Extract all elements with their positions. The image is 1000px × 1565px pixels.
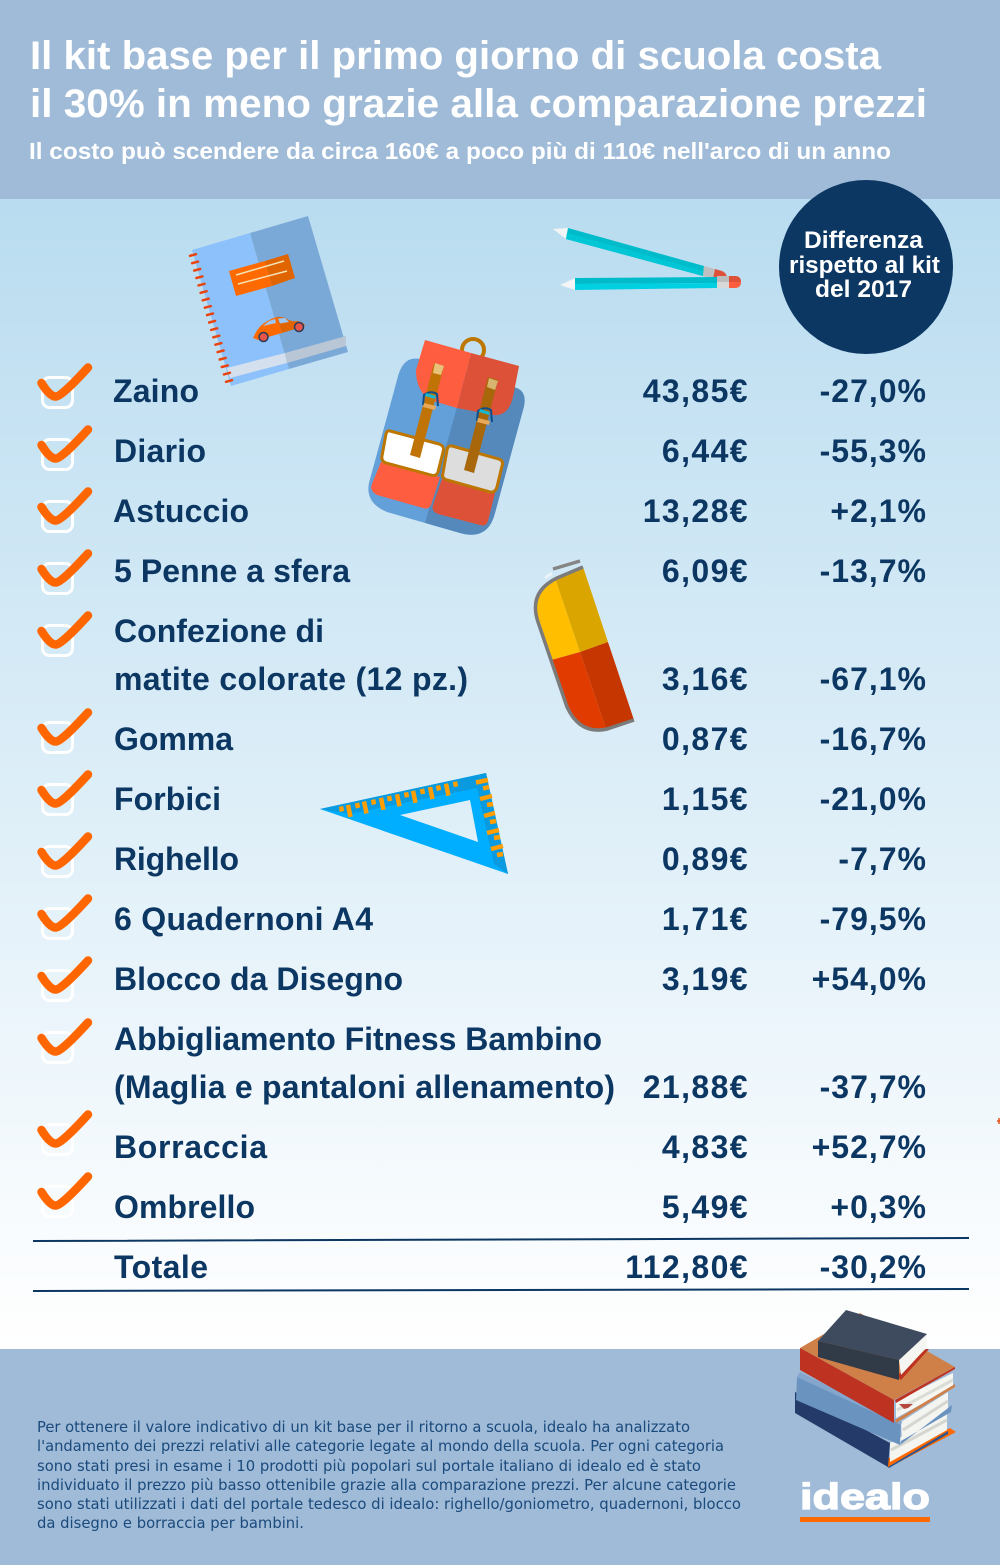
row: Ombrello: Ombrello xyxy=(114,1189,255,1225)
row: matite colorate: 3,16€ xyxy=(662,661,749,697)
row: Zaino: Zaino xyxy=(113,373,199,409)
row: Righello: -7,7% xyxy=(838,841,927,877)
row: Abbigliamento Fitness Bambino: 21,88€ xyxy=(643,1069,749,1105)
row: matite colorate: Confezione di xyxy=(114,613,324,649)
row: Blocco da Disegno xyxy=(42,960,927,1000)
row: Abbigliamento Fitness Bambino xyxy=(42,1021,927,1105)
row: Ombrello xyxy=(42,1176,927,1225)
row: 6 Quadernoni A4: -79,5% xyxy=(820,901,927,937)
row: Forbici xyxy=(42,774,927,817)
row: Diario: -55,3% xyxy=(820,433,927,469)
row: Righello xyxy=(42,836,927,877)
row: Righello: 0,89€ xyxy=(662,841,749,877)
row: Blocco da Disegno: Blocco da Disegno xyxy=(114,961,403,997)
row: Borraccia: +52,7% xyxy=(812,1129,927,1165)
page background gradient xyxy=(0,199,1000,1349)
icon: stack of books xyxy=(795,1310,956,1468)
row: 6 Quadernoni A4: 1,71€ xyxy=(662,901,749,937)
row: Gomma: -16,7% xyxy=(820,721,927,757)
footnote text: da disegno e borraccia per bambini. xyxy=(37,1514,304,1532)
row: Astuccio: +2,1% xyxy=(830,493,927,529)
row: Ombrello: 5,49€ xyxy=(662,1189,749,1225)
row: Abbigliamento Fitness Bambino: (Maglia e pantaloni allenamento) xyxy=(114,1069,615,1105)
footnote text: Per ottenere il valore indicativo di un kit base per il ritorno a scuola, idealo ha analizzato xyxy=(37,1418,690,1436)
row: 5 Penne a sfera xyxy=(42,553,927,594)
icon: pencils xyxy=(553,228,741,290)
footnote text: sono stati utilizzati i dati del portale tedesco di idealo: righello/goniometro, quadernoni, blocco xyxy=(37,1495,741,1513)
row: Zaino xyxy=(42,368,927,409)
row: 6 Quadernoni A4: 6 Quadernoni A4 xyxy=(114,901,373,937)
row: Blocco da Disegno: +54,0% xyxy=(812,961,927,997)
footer band xyxy=(0,1349,1000,1565)
header band xyxy=(0,0,1000,199)
row: 6 Quadernoni A4 xyxy=(42,898,927,938)
row: Forbici: Forbici xyxy=(114,781,221,817)
subtitle: Il costo può scendere da circa 160€ a poco più di 110€ nell'arco di un anno xyxy=(29,138,891,164)
row: Totale: 112,80€ xyxy=(625,1249,749,1285)
title: Il kit base per il primo giorno di scuola costa xyxy=(30,34,882,78)
row: Blocco da Disegno: 3,19€ xyxy=(662,961,749,997)
row: Forbici: 1,15€ xyxy=(662,781,749,817)
icon: notebook xyxy=(190,216,348,386)
row: Zaino: -27,0% xyxy=(820,373,927,409)
footnote text: l'andamento dei prezzi relativi alle categorie legate al mondo della scuola. Per ogni categoria xyxy=(37,1437,724,1455)
row: Diario: 6,44€ xyxy=(662,433,749,469)
row: matite colorate: matite colorate (12 pz.) xyxy=(114,661,468,697)
row: Gomma: Gomma xyxy=(114,721,233,757)
row: Astuccio xyxy=(42,492,927,532)
callout: difference circle xyxy=(779,180,953,354)
row: Astuccio: Astuccio xyxy=(113,493,249,529)
footnote text xyxy=(37,1418,741,1532)
row: Ombrello: +0,3% xyxy=(830,1189,927,1225)
row: Borraccia: 4,83€ xyxy=(662,1129,749,1165)
logo: idealo: idealo xyxy=(800,1476,930,1517)
row: 5 Penne a sfera: 5 Penne a sfera xyxy=(114,553,350,589)
row: matite colorate xyxy=(42,613,927,697)
row: Forbici: -21,0% xyxy=(820,781,927,817)
title: il 30% in meno grazie alla comparazione prezzi xyxy=(30,82,927,126)
title xyxy=(30,34,927,126)
icon: set square ruler xyxy=(320,773,508,874)
row: Astuccio: 13,28€ xyxy=(643,493,749,529)
row: Gomma: 0,87€ xyxy=(662,721,749,757)
footnote text: sono stati presi in esame i 10 prodotti più popolari sul portale italiano di idealo ed è stato xyxy=(37,1457,701,1475)
row: Borraccia: Borraccia xyxy=(114,1129,267,1165)
row: Totale: -30,2% xyxy=(820,1249,927,1285)
row: Diario: Diario xyxy=(114,433,206,469)
row: 5 Penne a sfera: 6,09€ xyxy=(662,553,749,589)
row: Diario xyxy=(42,430,927,470)
callout: difference circle: rispetto al kit xyxy=(789,252,940,279)
row: Borraccia xyxy=(42,1114,927,1165)
row: Totale xyxy=(114,1249,927,1285)
row: Righello: Righello xyxy=(114,841,239,877)
row: Abbigliamento Fitness Bambino: -37,7% xyxy=(820,1069,927,1105)
row: 5 Penne a sfera: -13,7% xyxy=(820,553,927,589)
callout: difference circle: Differenza xyxy=(804,227,924,254)
icon: backpack xyxy=(368,337,525,535)
row: Abbigliamento Fitness Bambino: Abbigliamento Fitness Bambino xyxy=(114,1021,602,1057)
row: Zaino: 43,85€ xyxy=(643,373,749,409)
row: Totale: Totale xyxy=(114,1249,208,1285)
footnote text: individuato il prezzo più basso ottenibile grazie alla comparazione prezzi. Per alcune categorie xyxy=(37,1476,736,1494)
row: matite colorate: -67,1% xyxy=(820,661,927,697)
icon: pencil case xyxy=(534,559,634,732)
callout: difference circle: del 2017 xyxy=(815,276,912,303)
row: Gomma xyxy=(42,712,927,757)
